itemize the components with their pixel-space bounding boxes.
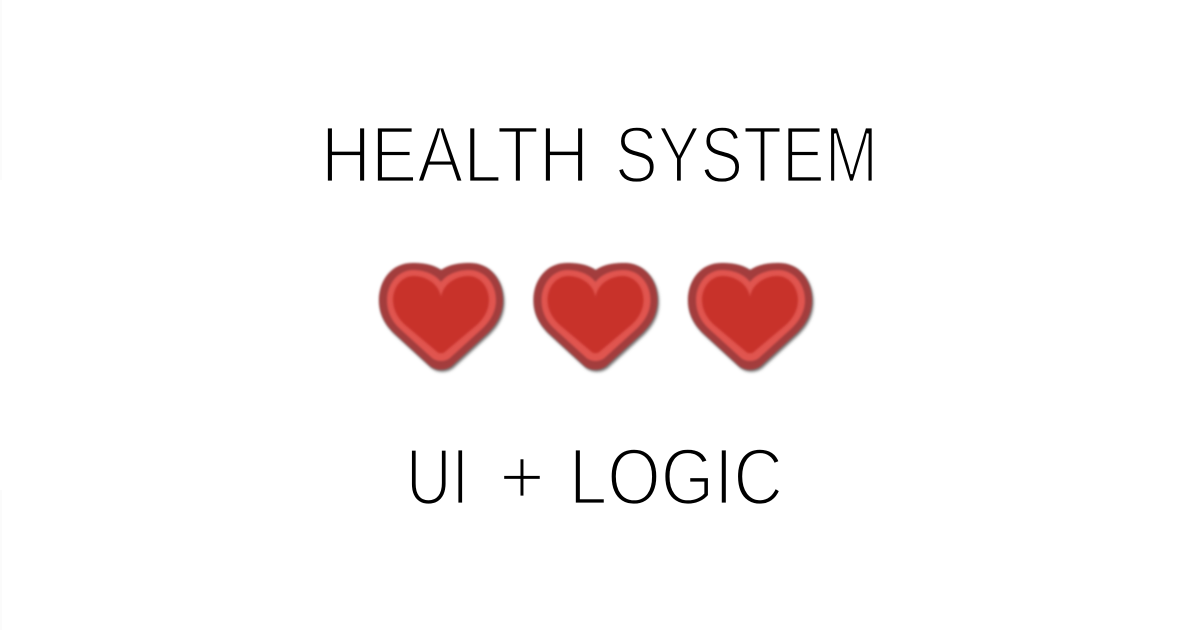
subtitle: LOGIC xyxy=(569,432,783,521)
icon: heart 2 xyxy=(534,263,659,372)
title: SYSTEM xyxy=(615,110,878,199)
subtitle xyxy=(406,432,783,521)
title: HEALTH xyxy=(321,110,589,199)
icon: heart 3 xyxy=(688,263,814,372)
subtitle: UI xyxy=(406,432,469,521)
heart row xyxy=(379,263,814,372)
title xyxy=(321,110,878,199)
edge artefact: bottom left xyxy=(0,490,2,630)
icon: heart 1 xyxy=(379,263,504,372)
subtitle: + xyxy=(499,432,545,521)
edge artefact: top left xyxy=(0,0,2,180)
